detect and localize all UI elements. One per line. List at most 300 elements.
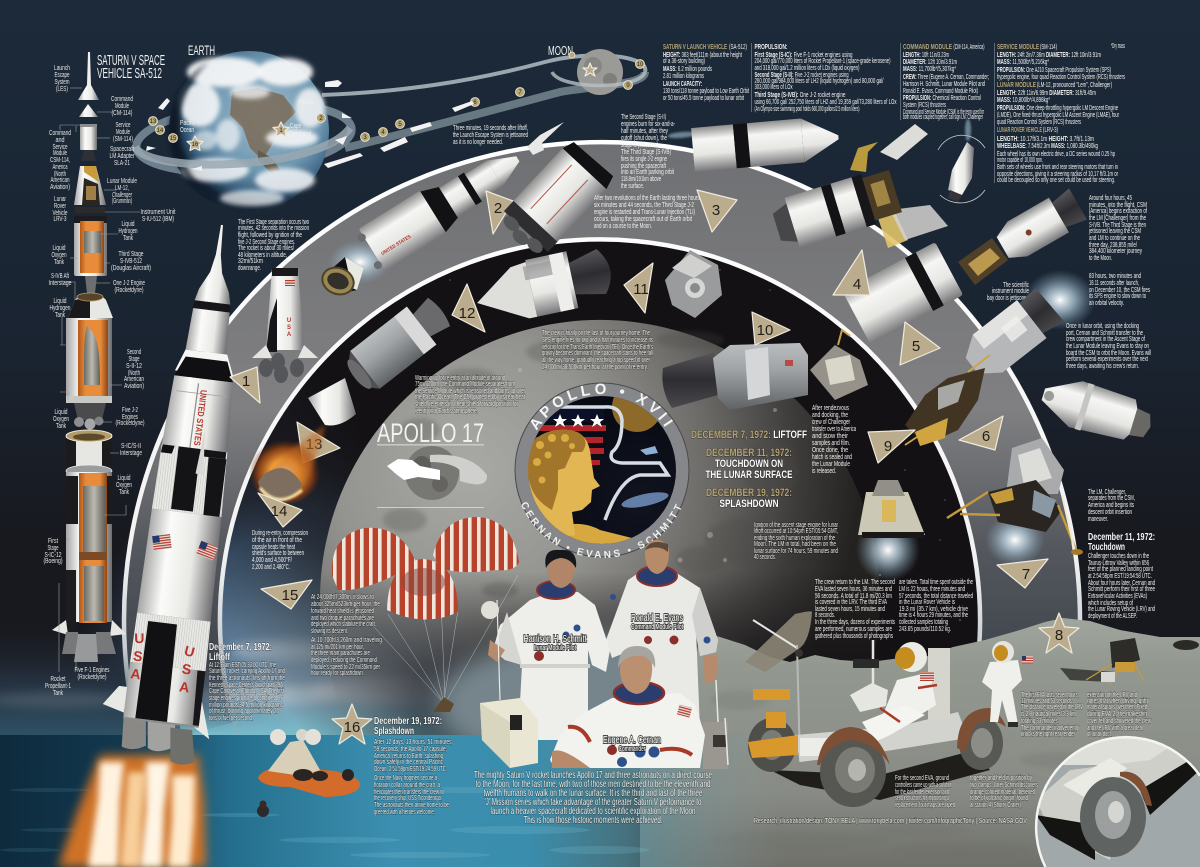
text: EVA summary: The crew return to the LM. The second (815, 577, 895, 586)
back-left wheel (748, 718, 796, 772)
text: second and third stage burn: pushing the spacecraft (621, 161, 666, 170)
text: LM extraction: three day, 238,855 mile/ (1089, 240, 1137, 249)
text: first stage separation: five J-2 Second Stage engines. (238, 237, 295, 246)
marker 11: 11 (633, 281, 649, 298)
splashdown capsule with raft (257, 729, 360, 817)
text: EVA totals: 19.3 mi (35.7 km), vehicle drive (899, 604, 968, 613)
second stage label: American (124, 374, 144, 383)
LOx label: Tank (54, 257, 64, 266)
five J-2 label (116, 405, 144, 427)
spec column: Saturn V launch vehicle: SATURN V LAUNCH VEHICLE (663, 42, 727, 51)
Earth orbit milestones: 15 (170, 136, 177, 142)
LOx label three: Tank (119, 487, 129, 496)
text: LM separation: America and begins its (1088, 500, 1134, 509)
text: *Dry mass (1111, 41, 1125, 50)
LOx label: Liquid (52, 243, 66, 252)
S-IC/S-II interstage (66, 430, 112, 466)
CSM label: (North (54, 169, 66, 178)
text: EVA summary: 56 seconds. A total of 11.8 mi/20.3 km (815, 591, 892, 600)
third stage label: Third Stage (118, 249, 144, 258)
text: first stage separation: downrange. (238, 263, 261, 272)
F-1 label: Five F-1 Engines (74, 665, 110, 674)
text: touchdown: the Lunar Roving Vehicle (LRV) and (1088, 604, 1155, 613)
text: second and third stage burn: The Third Stage (S-IVB) (621, 147, 671, 156)
USA lettering: U (134, 630, 145, 646)
third stage label (111, 249, 151, 272)
text: TEI: gravity becomes dominant, the spacecraft starts to free-fall (542, 348, 653, 357)
text: LM extraction: Around four hours, 45 (1089, 193, 1132, 202)
marker 6: 6 (982, 428, 990, 445)
LM label: (Grumman) (112, 196, 132, 205)
text: docking after EVA: samples and film. (812, 438, 850, 447)
CSM label: Command (49, 128, 71, 137)
text: second EVA (895, 773, 955, 809)
text: first stage separation: 32mi/51km (238, 256, 263, 265)
first stage label: S-IC-12 (44, 550, 62, 559)
text: TEI (542, 328, 653, 371)
marker 9: 9 (884, 438, 892, 455)
second stage (66, 293, 113, 430)
small lunar module (1086, 638, 1143, 684)
intro paragraph (474, 770, 712, 826)
LRV label: Vehicle (52, 208, 68, 217)
RP-1 label: Propellant-1 (45, 681, 71, 690)
key mission dates (691, 429, 807, 510)
marker 10 (752, 312, 790, 345)
spacecraft LM adapter (74, 166, 106, 213)
right wheel and fender (957, 708, 1006, 770)
intro paragraph: The mighty Saturn V rocket launches Apollo 17 and three astronauts on a direct course (474, 770, 712, 781)
LRV label: Lunar (54, 194, 66, 203)
text: parachutes: about 325mi/523km per hour, the (311, 599, 380, 608)
spec column: command module: (CM-114, America) (954, 42, 984, 51)
spec column: service module, lunar module, rover: LUNAR ROVER VEHICLE (997, 125, 1042, 134)
J-2 label (113, 278, 145, 294)
text: touchdown: About four hours later, Cernan and (1088, 578, 1155, 587)
aft interstage label (48, 271, 72, 287)
patch galaxy (622, 492, 668, 508)
text: re-entry: 4,000 and 4,500°F/ (252, 555, 292, 564)
text: second and third stage burn: engines burn for six-and-a- (621, 119, 675, 128)
LH2 label: Tank (123, 233, 133, 242)
spec column: service module, lunar module, rover: quad Reaction Control System (RCS) thrusters (997, 117, 1081, 126)
text: CM/SM separation: reentry into Earth's atmosphere. (415, 406, 478, 415)
small spacecraft silhouettes (146, 80, 474, 171)
text: lunar orbit docking: crew compartment in the Ascent Stage of (1066, 334, 1145, 343)
text: lunar liftoff: Moon. The LM in total, had been on the (754, 539, 836, 548)
text: docking after EVA: Once done, the (812, 445, 848, 454)
text: lunar orbit docking: three days, awaiting his crew's return. (1066, 361, 1139, 370)
Earth orbit milestones: 16 (192, 142, 199, 148)
name: Schmitt: Lunar Module Pilot (534, 645, 576, 652)
spec column: service module, lunar module, rover: MASS: 11,500lb*/5,216kg* (997, 57, 1049, 66)
first stage separation: spent S-IC: A (287, 332, 292, 338)
main Saturn V rocket: UNITED STATES (192, 389, 209, 446)
text: LM extraction (1088, 193, 1147, 262)
docked CSM (993, 187, 1088, 265)
text: first stage separation: The First Stage separation occurs two (238, 217, 309, 226)
text: splashdown: Once the Navy frogmen secure a (374, 773, 437, 782)
text: lunar orbit docking (1066, 321, 1151, 370)
text: fender: extension off the LRV and (1087, 690, 1137, 699)
spec column: Saturn V launch vehicle: 2.81 million kilograms (663, 71, 704, 80)
command module (308, 378, 356, 426)
LOx label three: Oxygen (116, 480, 132, 489)
text: EVA totals: in the Lunar Rover Vehicle is (899, 597, 955, 606)
text: trans-lunar injection: After two revolutions of the Earth lasting three hours, (594, 193, 701, 202)
Saturn V exploded stack (52, 52, 140, 672)
parachutes (332, 517, 519, 712)
text: parachutes: At 24,000ft/7,300m, it slows to (311, 592, 374, 601)
LES label: (LES) (56, 84, 68, 93)
text: trans-lunar injection (594, 193, 701, 230)
text: lunar liftoff: Ignition of the ascent stage engine for lunar (754, 520, 838, 529)
CSM label (49, 128, 71, 191)
main Saturn V rocket (97, 218, 272, 768)
LES label: System (54, 77, 70, 86)
first stage label: (Boeing) (44, 556, 62, 565)
text: fender: cover fell and showered the crew (1087, 716, 1151, 725)
key mission dates: THE LUNAR SURFACE (706, 469, 792, 481)
spec column: service module, lunar module, rover: WHEELBASE: 7.54ft/2.3m MASS: 1,080.3lb/490kg (997, 141, 1098, 150)
RP-1 label (45, 674, 71, 697)
CSM label: and (56, 135, 64, 144)
spec column: service module, lunar module, rover: LUNAR MODULE (997, 80, 1036, 89)
text: docking after EVA: crew of Challenger (812, 417, 850, 426)
text: first stage separation: minutes, 42 seconds into the mission (238, 223, 309, 232)
LES label: Escape (54, 70, 70, 79)
LOx label two: Oxygen (53, 414, 69, 423)
text: splashdown: The astronauts then arrive home to be (374, 800, 449, 809)
text: liftoff (209, 642, 285, 722)
text: parachutes: Module's speed to 22 mi/35km per (311, 662, 380, 671)
Apollo 17 mission patch: CERNAN • EVANS • SCHMITT (522, 502, 682, 558)
orange equipment (748, 689, 798, 758)
text: lunar liftoff (754, 520, 838, 561)
text: second and third stage burn: fires its single J-2 engine (621, 154, 667, 163)
text: splashdown: Splashdown (374, 726, 414, 737)
text: TEI: all the way home, gradually reaching a top speed of over (542, 355, 650, 364)
second stage label: Stage (128, 354, 140, 363)
spec column: propulsion: (An Olympic-size swimming pool holds 660,000 gallons/2.5 million liters) (754, 104, 860, 113)
text: re-entry (252, 528, 308, 571)
spec column: service module, lunar module, rover: LENGTH: 22ft 11in/6.99m DIAMETER: 31ft/9.45m (997, 88, 1096, 97)
USA lettering: A (130, 665, 142, 682)
third stage label: (Douglas Aircraft) (111, 263, 151, 272)
spec column: propulsion: Third Stage (S-IVB): One J-2 rocket engine (754, 90, 846, 99)
text: CM/SM separation: the Pacific Ocean. The CM, protected by its rear heat (415, 392, 525, 401)
intro paragraph: launch a heavier spacecraft dedicated to scientific exploration of the Moon (490, 806, 696, 817)
text: EVA summary: gathered plus thousands of photographs (815, 631, 893, 640)
text: docking after EVA (812, 403, 856, 475)
jettisoned interstage ring (319, 240, 392, 299)
equipment right (703, 680, 728, 769)
canopy right (433, 517, 519, 572)
text: touchdown: Extravehicular Activities (EVAs) (1088, 591, 1147, 600)
key mission dates: DECEMBER 7, 1972: LIFTOFF (691, 429, 807, 441)
Earth orbit ring, front half (135, 128, 350, 165)
text: splashdown: America, returns to Earth, splashing (374, 751, 443, 760)
third stage with LM exposed (769, 166, 903, 252)
text: docking after EVA: After rendezvous (812, 403, 849, 412)
Earth with orbit ring: Atlantic (298, 97, 315, 106)
text: splashdown: greeted with a heroes welcome. (374, 807, 435, 816)
SLA label: LM Adapter (110, 151, 135, 160)
text: docking after EVA: and stow their (812, 431, 848, 440)
text: EVA totals: 243.65 pounds/110.52 kg. (899, 624, 951, 633)
name: Evans: Ronald E. Evans (631, 613, 683, 624)
text: trans-lunar injection: and on a course to the Moon. (594, 221, 652, 230)
text: parachutes: and two drogue parachutes are (311, 613, 374, 622)
text: touchdown: deployment of the ALSEP. (1088, 611, 1137, 620)
LES label: Launch (54, 63, 70, 72)
Apollo 17 mission patch (514, 382, 690, 558)
patch trajectory (548, 407, 668, 520)
spec column: propulsion: 260,000 gal/984,000 liters of LH2 (liquid hydrogen) and 80,000 gal/ (754, 76, 884, 85)
text: splashdown: Ocean, 2:51:59pm EST/19:24:59 UTC. (374, 764, 447, 773)
text: liftoff: Kennedy Space Center's launch pad 39A, (209, 680, 284, 689)
text: splashdown: flotation collar around the craft, a (374, 780, 440, 789)
text: parachutes: forward heat shield is jettisoned (311, 606, 374, 615)
LOx label two (53, 407, 69, 430)
stack labels (44, 63, 176, 697)
inset: rover fender repair (1030, 735, 1200, 867)
text: parachutes: deployed, reducing the Command (311, 655, 377, 664)
spec column: propulsion (751, 42, 897, 113)
text: EVA summary: 8 seconds. (815, 610, 835, 619)
text: parachutes: hour ready for splashdown. (311, 668, 364, 677)
text: liftoff: million pounds/34.5 million kilograms (209, 700, 283, 709)
interstage label (120, 441, 142, 457)
text: parachutes (311, 592, 382, 677)
wheel (1080, 777, 1146, 857)
spec column: propulsion: 303,000 liters of LOx (754, 82, 793, 91)
text: lunar orbit docking: the Lunar Module leaving Evans to stay on (1066, 341, 1149, 350)
credit line: Research, illustration/design: TONY BELA | www.tonybela.com | twitter.com/InfographicTony | Source: NASA.GOV (754, 816, 1027, 825)
text: CM/SM separation: the Service Module which is jettisoned and burns up over (415, 386, 525, 395)
name: Cernan (603, 735, 661, 753)
marker 3: 3 (712, 202, 720, 219)
marker 7 (997, 559, 1048, 588)
marker 5: 5 (912, 338, 920, 355)
patch ring lettering: APOLLO • XVII (530, 384, 673, 430)
intro paragraph: to the Moon, for the last time, with two of those men destined to be the eleventh and (476, 779, 710, 790)
text: first stage separation: The rocket is about 30 miles/ (238, 243, 294, 252)
text: fender: and the LRV with a great deal (1087, 723, 1143, 732)
marker 14: 14 (271, 503, 287, 520)
spec column: service module, lunar module, rover: (LM-12, pronounced "Lem", Challenger) (1037, 80, 1112, 89)
text: EVA totals (899, 577, 973, 633)
spec column: service module, lunar module, rover: opposite directions, giving it a steering radius of 10.17 ft/3.1m or (997, 169, 1118, 178)
text: parachutes: deployed which stabilize the craft, (311, 619, 376, 628)
spec column: command module: DIAMETER: 12ft 10in/3.91m (903, 57, 957, 66)
text: EVA summary: are performed, numerous samples are (815, 624, 892, 633)
key mission dates: DECEMBER 11, 1972: (706, 447, 792, 459)
CSM label: America (52, 162, 68, 171)
second stage label: (North (128, 368, 140, 377)
Eugene Cernan (550, 646, 705, 768)
marker 15: 15 (282, 587, 298, 604)
LM label: Challenger (112, 190, 132, 199)
text: parachutes: At 10,700ft/3,260m and traveling (311, 635, 382, 644)
text: re-entry: 2,200 and 2,480°C. (252, 562, 290, 571)
marker 15 (261, 580, 312, 609)
USA lettering (127, 629, 197, 696)
J-2 label: One J-2 Engine (113, 278, 145, 287)
Moon surface backdrop (320, 320, 880, 700)
spec column: Saturn V launch vehicle: HEIGHT: 363 feet/111m (about the height (663, 50, 742, 59)
USA flags (150, 532, 219, 561)
USA lettering: A (178, 678, 190, 695)
white panel (1064, 758, 1127, 797)
spec column: service module, lunar module, rover: PROPULSION: One deep-throttling hypergolic LM Descent Engine (997, 103, 1118, 112)
text: EVA summary: lasted seven hours, 15 minutes and (815, 604, 885, 613)
text: LM extraction: S-IVB. The Third Stage is then (1089, 220, 1146, 229)
fender (1120, 772, 1152, 806)
text: first EVA: is 2.8 nautical miles/3.3 km (1021, 709, 1076, 718)
inner white arc (220, 239, 980, 735)
trajectory milestones: 5 (398, 122, 402, 128)
text: lunar orbit insertion: on December 10, the CSM fires (1089, 285, 1150, 294)
text: touchdown (1087, 532, 1155, 620)
intro paragraph: twelfth humans to walk on the lunar surface. It is the third and last of the three (484, 788, 703, 799)
stage two rocket with S-II: UNITED STATES (380, 234, 413, 257)
CM label: Module (115, 101, 129, 110)
text: splashdown: the recovery ship, USS Ticonderoga. (374, 793, 442, 802)
first stage interstage (152, 444, 229, 517)
text: first EVA: The first EVA lasts seven hours, (1021, 690, 1079, 699)
text: splashdown: down safely in the central Pacific (374, 757, 443, 766)
text: LES jettison: the Launch Escape System is jettisoned (453, 130, 528, 139)
text: LES jettison (453, 123, 528, 146)
labels on globe: Pacific (180, 118, 195, 127)
heading: Saturn V space vehicle: VEHICLE SA-512 (97, 65, 162, 82)
IU label: Instrument Unit (140, 207, 176, 216)
text: second and third stage burn: into an Earth parking orbit (621, 167, 674, 176)
spec column: Saturn V launch vehicle: or 50 tons/45.5 tonne payload to lunar orbit (663, 93, 744, 102)
marker 1: 1 (242, 373, 250, 390)
text: second EVA: For the second EVA, ground (895, 773, 949, 782)
LM label (107, 176, 137, 205)
TV camera mast (850, 640, 888, 712)
text: CM/SM separation: shield, re-enters in a heat-shield forward position for (415, 399, 518, 408)
spec column: command module: CREW: Three (Eugene A. Cernan, Commander; (903, 72, 989, 81)
spec column: command module: Ronald E. Evans, Command Module Pilot) (903, 86, 978, 95)
marker 1 (230, 367, 260, 403)
interstage label: Interstage (120, 448, 142, 457)
black space band (221, 241, 979, 735)
text: SIM bay door: The scientific (1003, 280, 1029, 289)
first stage separation: spent S-IC (252, 268, 318, 383)
marker 7: 7 (1022, 566, 1030, 583)
translunar trajectory with Moon (146, 43, 645, 171)
spec column: service module, lunar module, rover: MASS: 10,800lb*/4,898kg* (997, 95, 1050, 104)
third stage (186, 300, 232, 354)
marker 2: 2 (494, 200, 502, 217)
text: EVA totals: LM is 22 hours, three minutes and (899, 584, 965, 593)
spec column: Saturn V launch vehicle: LAUNCH CAPACITY: (663, 79, 702, 88)
text: first EVA: The distance traveled in the LRV (1021, 702, 1083, 711)
text: EVA totals: are taken. Total time spent outside the (899, 577, 973, 586)
text: LM extraction: the LM [Challenger] from the (1089, 213, 1146, 222)
SM label (113, 120, 133, 143)
text: TEI: SPS engine fires for two and a half minutes to increase its (542, 335, 653, 344)
CSM turnaround (938, 119, 985, 203)
spec column: Saturn V launch vehicle (663, 42, 749, 102)
LH2 label two: Tank (55, 310, 65, 319)
name: Evans: Command Module Pilot (631, 624, 683, 631)
Earth orbit milestones: 2 (319, 116, 323, 122)
CSM label: Aviation) (50, 182, 70, 191)
spec column: Saturn V launch vehicle: 130 tons/118 tonne payload to Low Earth Orbit (663, 86, 749, 95)
marker 12: 12 (459, 305, 475, 322)
LM powered descent (947, 438, 1083, 566)
LH2 label two (50, 296, 70, 319)
text: splashdown: After 12 days, 13 hours, 51 minutes, (374, 737, 453, 746)
text: second and third stage burn (621, 112, 675, 190)
ocean (0, 735, 780, 867)
CM label (111, 94, 133, 117)
text: second and third stage burn: half minutes, after they (621, 126, 668, 135)
five J-2 label: (Rocketdyne) (116, 418, 144, 427)
text: LM separation (1088, 487, 1135, 523)
LH2 label two: Liquid (54, 296, 66, 305)
spec column: Saturn V launch vehicle: of a 36-story building) (663, 56, 705, 65)
text: LM extraction: 384,400 kilometer journey (1089, 246, 1142, 255)
text: LM extraction: jettisoned leaving the CSM (1088, 226, 1141, 235)
marker 8: 8 (1055, 627, 1063, 644)
SM label: Module (116, 127, 130, 136)
text: parachutes: slowing its descent. (311, 626, 348, 635)
intro paragraph: 'J' Mission series which take advantage of the greater Saturn V performance to (484, 797, 702, 808)
text: lunar liftoff: liftoff occurred at 10:54pm EST/05:54 GMT, (754, 526, 838, 535)
spec column: command module (900, 42, 989, 121)
haze behind crew (435, 635, 765, 775)
flag (1022, 656, 1033, 664)
trajectory milestones: 9 (626, 83, 630, 89)
first stage separation: spent S-IC: U (287, 318, 291, 324)
spent S-II stage (494, 138, 616, 262)
text: lunar liftoff: 40 seconds. (754, 552, 776, 561)
spec column: service module, lunar module, rover: LENGTH: 24ft 2in/7.36m DIAMETER: 12ft 10in/3.91m (997, 50, 1101, 59)
spec column: service module, lunar module, rover: SERVICE MODULE (997, 42, 1039, 51)
J-2 label: (Rocketdyne) (114, 285, 144, 294)
text: docking after EVA: is released. (812, 466, 836, 475)
text: liftoff: Saturn V rocket, carrying Apollo 17 and (209, 666, 285, 675)
text: re-entry: shield's surface to between (252, 548, 304, 557)
text: EVA totals: 57 seconds, the total distance traveled (899, 591, 973, 600)
seated astronaut (862, 642, 950, 742)
LOx label three: Liquid (118, 473, 130, 482)
spec column: service module, lunar module, rover: Each wheel has its own electric drive, a DC series wound 0.25 hp (997, 149, 1115, 158)
text: touchdown: Touchdown (1088, 542, 1125, 553)
text: LM extraction: [America] begins extraction of (1089, 206, 1147, 215)
text: liftoff: December 7, 1972: (209, 642, 272, 653)
trajectory milestones: 10 (637, 62, 644, 68)
text: re-entry: of the air in front of the (252, 535, 302, 544)
LH2 label (118, 219, 138, 242)
SM label: (SM-114) (113, 134, 133, 143)
aft interstage (175, 349, 236, 378)
text: docking after EVA: the Lunar Module (812, 459, 850, 468)
equipment left (480, 600, 538, 768)
CSM in lunar orbit (1036, 371, 1157, 450)
rover shadow (770, 750, 990, 800)
text: trans-lunar injection: occurs, taking the spacecraft out of Earth orbit (594, 214, 692, 223)
marker 4: 4 (853, 276, 861, 293)
LOx label three (116, 473, 132, 496)
text: orange soil: to be of volcanic origin, found (970, 793, 1028, 802)
